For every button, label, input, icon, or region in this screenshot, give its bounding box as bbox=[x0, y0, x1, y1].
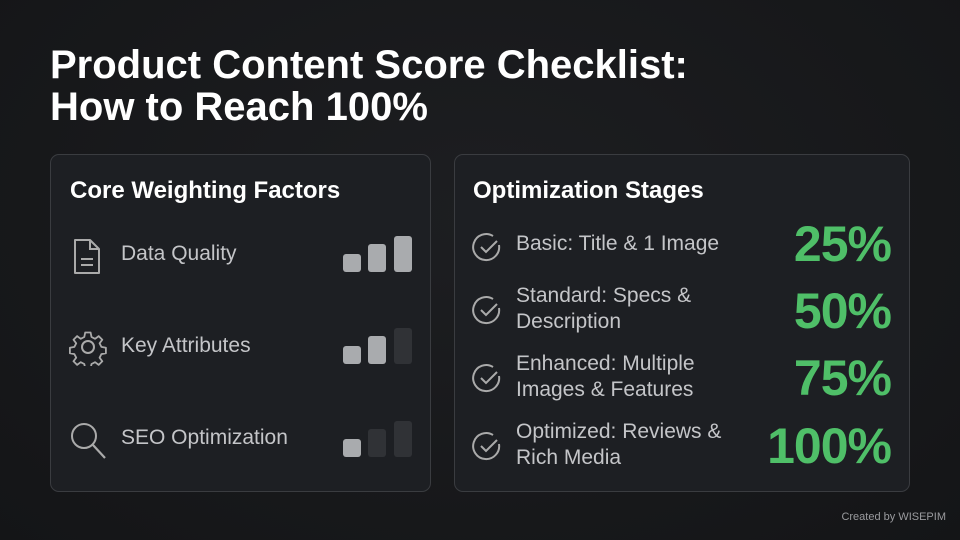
icon: gear bbox=[69, 332, 107, 366]
title: How to Reach 100% bbox=[50, 85, 428, 129]
label: Key Attributes bbox=[121, 334, 251, 357]
icon: document bbox=[74, 239, 100, 274]
stage 50: 50% bbox=[794, 283, 891, 339]
panel: optimization stages bbox=[454, 154, 910, 492]
stage 50: Standard: Specs & bbox=[516, 284, 691, 307]
title bbox=[50, 43, 688, 129]
stage 100: Rich Media bbox=[516, 446, 621, 469]
icon: magnifier bbox=[71, 423, 106, 459]
bars: data quality bbox=[343, 236, 412, 272]
stage 75: Enhanced: Multiple bbox=[516, 352, 695, 375]
title: Product Content Score Checklist: bbox=[50, 43, 688, 87]
stage 75: Images & Features bbox=[516, 378, 693, 401]
credit: Created by WISEPIM bbox=[841, 511, 946, 523]
stage 50: Description bbox=[516, 310, 621, 333]
heading: Optimization Stages bbox=[473, 177, 704, 204]
stage 25 bbox=[472, 216, 891, 272]
stage 100 bbox=[472, 418, 891, 474]
bars: seo bbox=[343, 421, 412, 457]
stage 100: Optimized: Reviews & bbox=[516, 420, 721, 443]
stage 25: Basic: Title & 1 Image bbox=[516, 232, 719, 255]
stage 50 bbox=[472, 283, 891, 339]
label: Data Quality bbox=[121, 242, 237, 265]
bars: key attributes bbox=[343, 328, 412, 364]
panel: core weighting factors bbox=[50, 154, 431, 492]
heading: Core Weighting Factors bbox=[70, 177, 340, 204]
stage 25: 25% bbox=[794, 216, 891, 272]
stage 75 bbox=[472, 350, 891, 406]
stage 75: 75% bbox=[794, 350, 891, 406]
stage 100: 100% bbox=[767, 418, 891, 474]
label: SEO Optimization bbox=[121, 426, 288, 449]
